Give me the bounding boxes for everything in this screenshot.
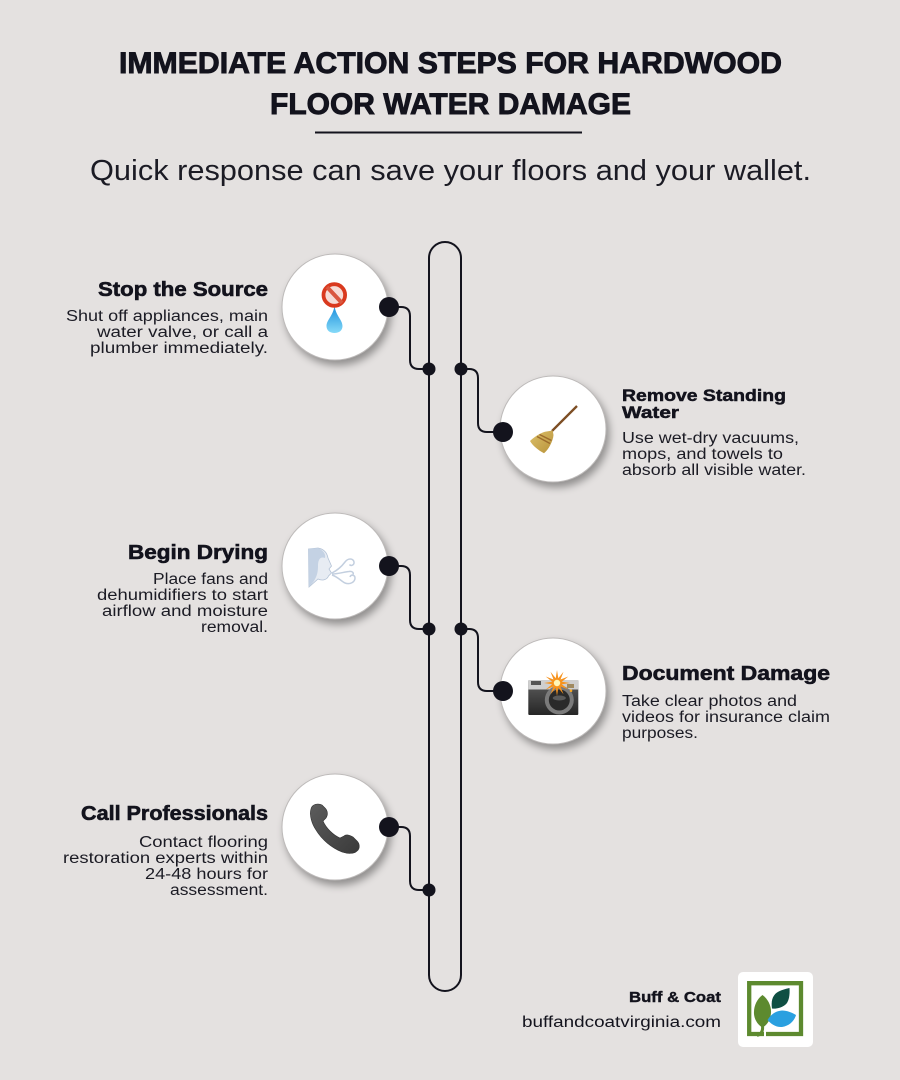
timeline tube	[429, 242, 461, 991]
text: call professionals: Call Professionals	[81, 803, 268, 825]
step 1: stop the source	[66, 254, 436, 376]
text: stop the source: Shut off appliances, main	[66, 308, 268, 325]
connector dots: step 3	[379, 556, 436, 636]
icon: no water	[324, 284, 345, 333]
text: remove standing water: Remove Standing	[622, 386, 786, 405]
text: begin drying: Place fans and	[153, 571, 268, 588]
step 4: document damage	[454, 622, 830, 744]
text: call professionals: restoration experts within	[63, 850, 268, 867]
connector dots: step 4	[454, 622, 513, 701]
subtitle: Quick response can save your floors and your wallet.	[90, 155, 811, 187]
text: remove standing water: Water	[622, 403, 679, 422]
connector dots: step 5	[379, 817, 436, 896]
text: begin drying: airflow and moisture	[102, 603, 268, 620]
text: stop the source: plumber immediately.	[90, 340, 268, 357]
text: stop the source	[66, 279, 268, 357]
logo	[738, 972, 813, 1047]
icon: wind face	[308, 548, 355, 587]
text: stop the source: Stop the Source	[98, 279, 268, 301]
text: remove standing water: mops, and towels to	[622, 446, 783, 463]
text: document damage: Take clear photos and	[622, 693, 797, 710]
text: call professionals: Contact flooring	[139, 834, 268, 851]
connector dots: step 1	[379, 297, 436, 376]
step 3: begin drying	[97, 513, 436, 636]
connector: step 1	[389, 307, 429, 369]
title: FLOOR WATER DAMAGE	[270, 88, 631, 121]
text: begin drying: Begin Drying	[128, 542, 268, 564]
node circle: step 1	[282, 254, 388, 360]
text: stop the source: water valve, or call a	[96, 324, 268, 341]
text: remove standing water: absorb all visible water.	[622, 462, 806, 479]
connector: step 3	[389, 566, 429, 629]
connector dots: step 2	[454, 362, 513, 442]
text: document damage	[622, 663, 830, 742]
icon: telephone receiver	[310, 804, 359, 853]
text: begin drying: dehumidifiers to start	[97, 587, 269, 604]
text: begin drying	[97, 542, 269, 636]
step 2: remove standing water	[454, 362, 806, 482]
text: document damage: videos for insurance claim	[622, 709, 830, 726]
node circle: step 4	[500, 638, 606, 744]
icon: broom	[530, 406, 577, 453]
text: document damage: purposes.	[622, 725, 698, 742]
node circle: step 3	[282, 513, 388, 619]
footer brand text	[522, 989, 721, 1031]
text: call professionals: 24-48 hours for	[145, 866, 268, 883]
connector: step 2	[461, 369, 503, 432]
icon: camera with flash	[528, 670, 578, 715]
text: remove standing water	[622, 386, 806, 479]
title underline	[315, 132, 582, 134]
footer brand text: buffandcoatvirginia.com	[522, 1014, 721, 1031]
connector: step 4	[461, 629, 503, 691]
text: begin drying: removal.	[201, 619, 268, 636]
footer brand text: Buff & Coat	[629, 989, 721, 1006]
connector: step 5	[389, 827, 429, 890]
text: remove standing water: Use wet-dry vacuums,	[622, 430, 799, 447]
title: IMMEDIATE ACTION STEPS FOR HARDWOOD	[119, 47, 782, 80]
node circle: step 2	[500, 376, 606, 482]
text: document damage: Document Damage	[622, 663, 830, 685]
title	[119, 47, 782, 121]
text: call professionals: assessment.	[170, 882, 268, 899]
text: call professionals	[63, 803, 268, 899]
node circle: step 5	[282, 774, 388, 880]
step 5: call professionals	[63, 774, 436, 899]
